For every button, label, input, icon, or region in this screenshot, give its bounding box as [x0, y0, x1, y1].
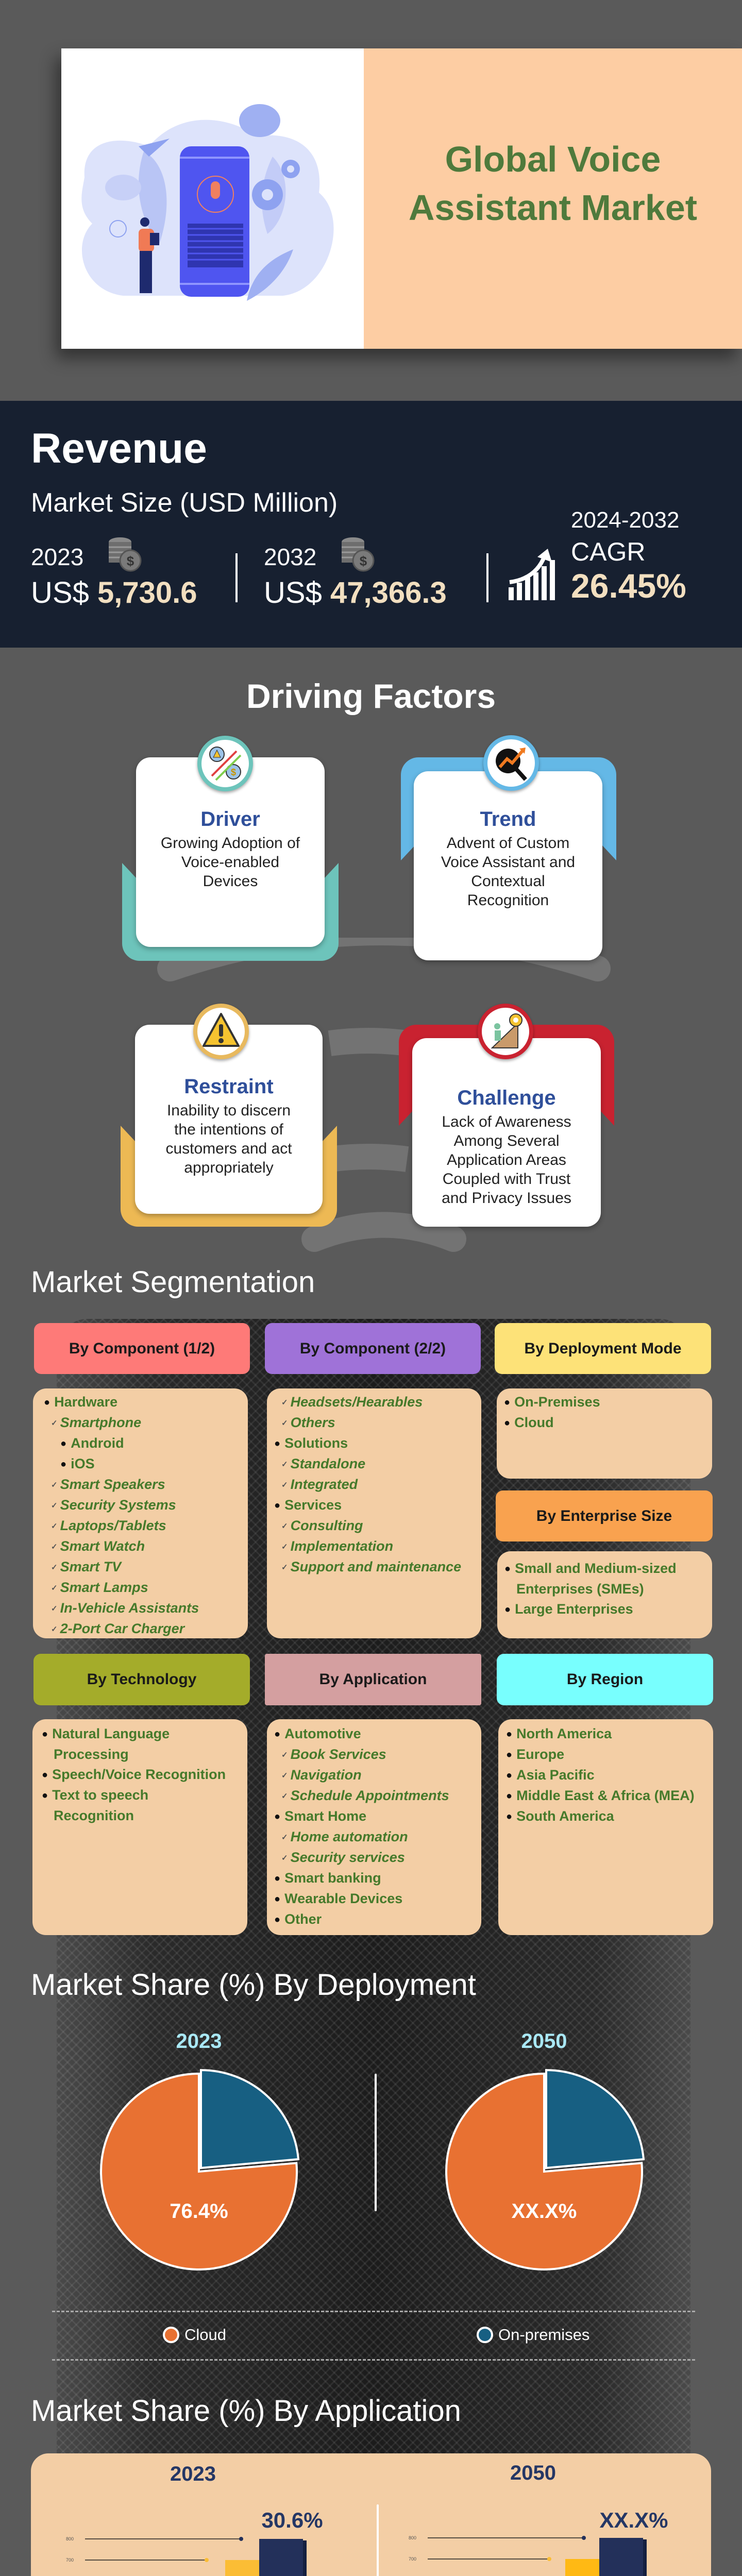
icon: warning: [193, 1004, 249, 1059]
segment: by component 2/2: Integrated: [291, 1477, 358, 1492]
segment: by technology: Natural Language: [52, 1726, 170, 1741]
segment: by region: Middle East & Africa (MEA): [516, 1788, 695, 1803]
bar chart panel: [31, 2453, 711, 2576]
icon: driver gears: [197, 736, 253, 791]
segment: by deployment mode: On-Premises: [514, 1394, 600, 1410]
segment: by deployment mode: [495, 1323, 712, 1479]
pie chart: 2050: 2050: [521, 2030, 567, 2053]
segment: by region: Asia Pacific: [516, 1767, 595, 1783]
segment: by region: By Region: [567, 1671, 643, 1688]
segment: by region: [497, 1654, 713, 1935]
revenue heading: Revenue: [31, 425, 207, 472]
2023 value: $: [127, 553, 134, 569]
deployment heading: Market Share (%) By Deployment: [31, 1968, 476, 2002]
panel: restraint: [121, 1004, 337, 1227]
segment: by technology: Speech/Voice Recognition: [52, 1767, 226, 1782]
bar chart: 2050: 800: [409, 2535, 416, 2540]
market size label: Market Size (USD Million): [31, 488, 338, 518]
panel: challenge: Lack of Awareness Among Several Application Areas Coupled with Trust and Privacy Issues: [442, 1113, 571, 1207]
segment: by component 2/2: Standalone: [291, 1456, 365, 1471]
bar chart: 2050: XX.X%: [599, 2508, 668, 2532]
bar chart panel: 2023: [170, 2463, 216, 2485]
segment: by component 1/2: Android: [71, 1435, 124, 1451]
pie chart: 2050: [445, 2030, 645, 2270]
decorative arcs: [157, 938, 611, 1252]
legend: deployment: [52, 2311, 695, 2361]
segment: by component 2/2: Headsets/Hearables: [291, 1394, 423, 1410]
2023 value: US$ 5,730.6: [31, 576, 197, 609]
divider: [235, 553, 238, 602]
segment: by technology: By Technology: [87, 1671, 196, 1688]
segment: by application: Security services: [291, 1850, 405, 1865]
segment: by technology: Text to speech: [52, 1787, 148, 1803]
segment: by application: Smart Home: [284, 1808, 366, 1824]
segment: by component 1/2: 2-Port Car Charger: [60, 1621, 184, 1636]
segment: by component 1/2: Laptops/Tablets: [60, 1518, 166, 1533]
segment: by application: Other: [284, 1911, 322, 1927]
application heading: Market Share (%) By Application: [31, 2394, 461, 2428]
panel: trend: Trend: [480, 808, 536, 831]
segment: by component 1/2: Smart Watch: [60, 1538, 145, 1554]
segment: by application: Wearable Devices: [284, 1891, 402, 1906]
panel: restraint: Inability to discern the intentions of customers and act appropriately: [165, 1102, 292, 1176]
header banner: [61, 48, 742, 349]
panel: challenge: Challenge: [457, 1087, 556, 1109]
segment: by region: Europe: [516, 1747, 564, 1762]
segment: by technology: Recognition: [54, 1808, 134, 1823]
title: Global Voice: [445, 139, 661, 179]
2032 value: 2032: [264, 544, 316, 570]
segment: by component 1/2: Smart Speakers: [60, 1477, 165, 1492]
pie chart: 2050: XX.X%: [512, 2200, 577, 2223]
segment: by deployment mode: Cloud: [514, 1415, 554, 1430]
CAGR: CAGR: [571, 537, 645, 566]
segment: by component 1/2: [33, 1323, 250, 1638]
market segmentation heading: Market Segmentation: [31, 1265, 315, 1299]
panel: restraint: Restraint: [184, 1075, 274, 1098]
bar chart: 2050: [409, 2508, 668, 2576]
segment: by enterprise size: Enterprises (SMEs): [516, 1581, 644, 1597]
bar chart: 2023: 700: [66, 2557, 74, 2563]
driving factors heading: Driving Factors: [246, 677, 496, 715]
CAGR: 2024-2032: [571, 507, 679, 533]
segment: by component 1/2: Security Systems: [60, 1497, 176, 1513]
bar chart: 2023: 800: [66, 2536, 74, 2541]
segment: by application: By Application: [319, 1671, 427, 1688]
bar chart: 2023: [66, 2508, 323, 2576]
panel: trend: [401, 735, 616, 964]
segment: by application: Automotive: [284, 1726, 361, 1741]
divider: [375, 2074, 377, 2211]
segment: by technology: [32, 1654, 250, 1935]
segment: by region: North America: [516, 1726, 612, 1741]
2032 value: US$ 47,366.3: [264, 576, 447, 609]
icon: challenge climber: [478, 1004, 533, 1059]
panel: trend: Advent of Custom Voice Assistant and Contextual Recognition: [441, 835, 575, 909]
2032 value: [264, 537, 447, 609]
segment: by component 1/2: Smart Lamps: [60, 1580, 148, 1595]
background: speaker texture: [57, 1319, 690, 2576]
icon: trend magnifier: [483, 735, 539, 791]
bar chart panel: 2050: [510, 2462, 556, 2484]
segment: by component 2/2: By Component (2/2): [300, 1340, 446, 1357]
segment: by component 2/2: Others: [291, 1415, 335, 1430]
segment: by component 1/2: In-Vehicle Assistants: [60, 1600, 199, 1616]
segment: by technology: Processing: [54, 1747, 129, 1762]
segment: by deployment mode: By Deployment Mode: [524, 1340, 682, 1357]
segment: by component 1/2: Smart TV: [60, 1559, 121, 1574]
segment: by enterprise size: Large Enterprises: [515, 1601, 633, 1617]
pie chart: 2023: [100, 2030, 300, 2270]
segment: by enterprise size: By Enterprise Size: [536, 1507, 672, 1524]
CAGR: 26.45%: [571, 567, 686, 605]
legend: deployment: Cloud: [184, 2326, 226, 2344]
segment: by application: Smart banking: [284, 1870, 381, 1886]
segment: by component 2/2: [265, 1323, 481, 1638]
segment: by application: Schedule Appointments: [291, 1788, 449, 1803]
panel: challenge: [399, 1004, 614, 1230]
segment: by component 2/2: Support and maintenance: [291, 1559, 461, 1574]
segment: by component 2/2: Implementation: [291, 1538, 393, 1554]
icon: driver gears: $: [231, 767, 236, 777]
divider: [486, 553, 488, 602]
segment: by component 1/2: iOS: [71, 1456, 95, 1471]
pie chart: 2023: 2023: [176, 2030, 222, 2053]
CAGR: [571, 507, 686, 605]
panel: driver: Driver: [200, 808, 260, 831]
segment: by component 1/2: Smartphone: [60, 1415, 141, 1430]
title: Assistant Market: [409, 188, 697, 228]
segment: by application: Home automation: [291, 1829, 408, 1844]
pie chart: 2023: 76.4%: [170, 2200, 228, 2223]
segment: by component 1/2: Hardware: [54, 1394, 117, 1410]
segment: by enterprise size: Small and Medium-sized: [515, 1561, 677, 1576]
revenue panel: [0, 401, 742, 648]
segment: by region: South America: [516, 1808, 614, 1824]
bar chart: 2050: 700: [409, 2556, 416, 2562]
segment: by application: Book Services: [291, 1747, 386, 1762]
segment: by application: Navigation: [291, 1767, 362, 1783]
legend: deployment: On-premises: [498, 2326, 589, 2344]
bar chart: 2023: 30.6%: [261, 2508, 323, 2532]
panel: driver: Growing Adoption of Voice-enabled Devices: [161, 835, 300, 890]
illustration: voice assistant: [61, 48, 364, 349]
2023 value: 2023: [31, 544, 83, 570]
icon: growth chart: [509, 549, 555, 600]
title: [364, 48, 742, 349]
segment: by application: [265, 1654, 481, 1935]
segment: by component 2/2: Consulting: [291, 1518, 363, 1533]
segment: by enterprise size: [496, 1490, 713, 1638]
2023 value: [31, 537, 197, 609]
2032 value: $: [360, 553, 367, 569]
panel: driver: [122, 736, 339, 961]
segment: by component 2/2: Solutions: [284, 1435, 348, 1451]
segment: by component 2/2: Services: [284, 1497, 342, 1513]
segment: by component 1/2: By Component (1/2): [69, 1340, 215, 1357]
